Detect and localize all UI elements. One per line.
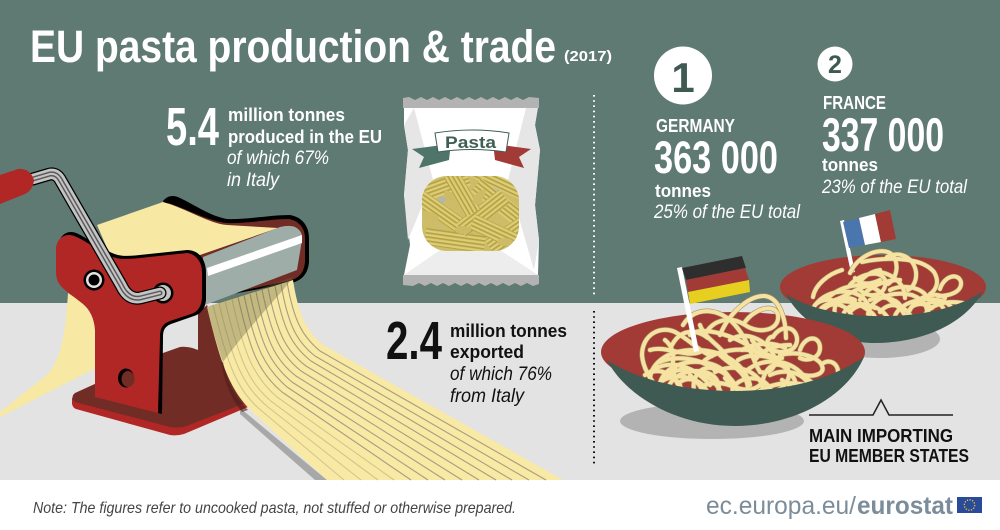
logo: eurostat [706, 492, 982, 520]
stat: France [821, 93, 968, 198]
dough sheet on top [97, 202, 278, 258]
rank badge 1 [654, 46, 712, 104]
rank badge 2 [818, 46, 852, 82]
bowl shadow [620, 403, 804, 439]
spaghetti [642, 296, 838, 397]
bolt holes [84, 270, 104, 290]
stat: 5.4 million tonnes produced [166, 97, 382, 191]
background: grey table [0, 303, 1000, 480]
label banner [435, 130, 509, 152]
bag facets [404, 108, 433, 240]
strand shadow [240, 408, 327, 480]
stat: 5.4 million tonnes produced: of which 67% [227, 148, 329, 169]
bag top seal [403, 97, 539, 108]
illustration: pasta bag [403, 97, 540, 286]
stat: France: 23% of the EU total [821, 177, 968, 198]
flag pole [677, 267, 699, 352]
flag pole [840, 220, 855, 273]
stat: Germany: tonnes [655, 180, 711, 201]
bag bottom seal [403, 275, 539, 286]
footnote: Note: The figures refer to uncooked pasta, not stuffed or otherwise prepared. [33, 500, 516, 517]
ribbon right [494, 144, 531, 168]
dotted divider top [593, 95, 595, 297]
ribbon left [412, 144, 450, 168]
caption: main importing EU member states: MAIN IMPORTING [809, 426, 953, 446]
rank badge 2: 2 [828, 51, 842, 79]
dotted divider bottom [593, 311, 595, 465]
French flag [843, 210, 896, 248]
machine base [72, 398, 248, 435]
caption: main importing EU member states: EU MEMBER STATES [809, 446, 969, 466]
stat: 2.4 million tonnes exported [386, 311, 567, 407]
window with penne [422, 176, 519, 251]
stat: 5.4 million tonnes produced: 5.4 [166, 97, 219, 157]
rear plate [163, 196, 309, 300]
roller [203, 226, 302, 305]
background: white footer [0, 480, 1000, 530]
label text: Pasta [445, 133, 497, 152]
stat: 2.4 million tonnes exported: million tonnes [450, 320, 567, 341]
spaghetti [812, 251, 963, 318]
title: (2017) [564, 48, 612, 65]
stat: 5.4 million tonnes produced: in Italy [227, 170, 280, 191]
bowl rim [601, 312, 865, 392]
bowl body [786, 291, 983, 343]
strand lines [213, 282, 546, 480]
flat strands [207, 280, 563, 480]
German flag [682, 256, 750, 304]
icon: EU flag [957, 497, 982, 513]
title: EU pasta production & trade [30, 21, 556, 72]
crank handle [33, 174, 160, 298]
logo: eurostat: ec.europa.eu/ [706, 492, 856, 520]
stat: France: tonnes [822, 154, 878, 175]
stat: France: FRANCE [823, 93, 886, 113]
stat: 5.4 million tonnes produced: million tonnes [228, 104, 345, 125]
dough tail behind the machine [0, 293, 96, 417]
bag body [404, 107, 540, 275]
stat: Germany: 363 000 [654, 132, 778, 183]
caption: main importing EU member states [809, 400, 969, 466]
rank badge 1: 1 [671, 54, 695, 101]
stat: 2.4 million tonnes exported: exported [450, 341, 524, 362]
bowl rim [780, 255, 986, 319]
bowl body [607, 357, 864, 426]
stat: 2.4 million tonnes exported: of which 76% [450, 364, 552, 385]
rear frame support [198, 305, 248, 405]
background: green wall [0, 0, 1000, 303]
stat: 2.4 million tonnes exported: from Italy [450, 386, 525, 407]
illustration: German bowl [601, 256, 865, 439]
crank grip [0, 169, 34, 204]
stat: Germany: 25% of the EU total [653, 202, 801, 223]
stat: Germany: GERMANY [656, 116, 735, 136]
shadow on strands below roller [207, 277, 293, 362]
bowl shadow [820, 320, 940, 358]
stat: 5.4 million tonnes produced: produced in the EU [228, 126, 382, 147]
illustration: pasta machine [0, 169, 563, 480]
stat: Germany [653, 116, 801, 223]
illustration: French bowl [780, 210, 986, 358]
logo: eurostat: eurostat [857, 492, 954, 520]
red frame [57, 232, 206, 414]
stat: France: 337 000 [822, 108, 944, 161]
stat: 2.4 million tonnes exported: 2.4 [386, 311, 442, 371]
